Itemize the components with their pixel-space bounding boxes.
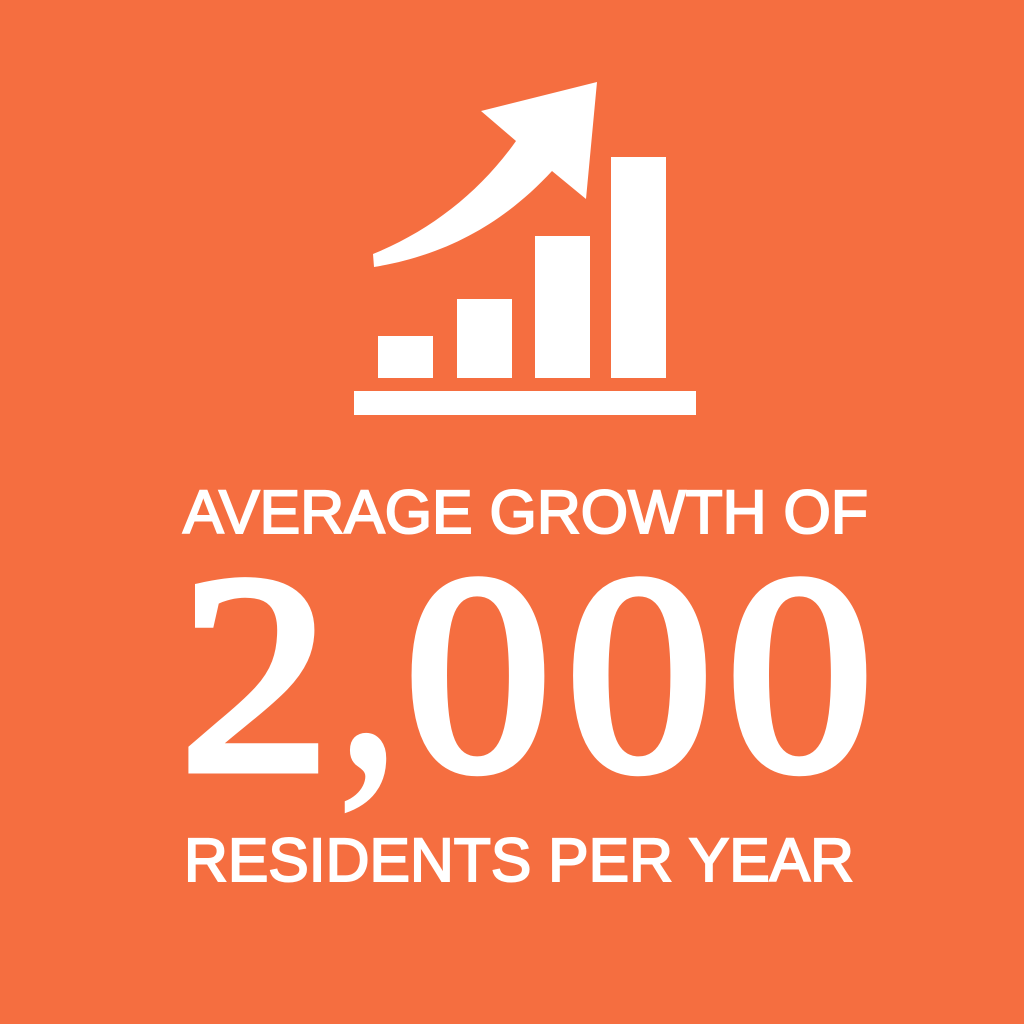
heading: average growth: AVERAGE GROWTH OF bbox=[183, 478, 868, 546]
bar 1 bbox=[378, 336, 433, 378]
icon: growth chart with arrow bbox=[354, 82, 696, 415]
bar 4 bbox=[611, 157, 666, 378]
baseline bbox=[354, 391, 696, 415]
big number bbox=[180, 518, 873, 831]
subheading: residents per year: RESIDENTS PER YEAR bbox=[184, 826, 854, 894]
bar 2 bbox=[457, 299, 512, 378]
comma: , bbox=[342, 535, 394, 830]
bar 3 bbox=[535, 236, 590, 378]
arrow bbox=[373, 82, 597, 267]
digit 2: 2 bbox=[180, 518, 330, 831]
digits 000: 000 bbox=[405, 518, 873, 831]
